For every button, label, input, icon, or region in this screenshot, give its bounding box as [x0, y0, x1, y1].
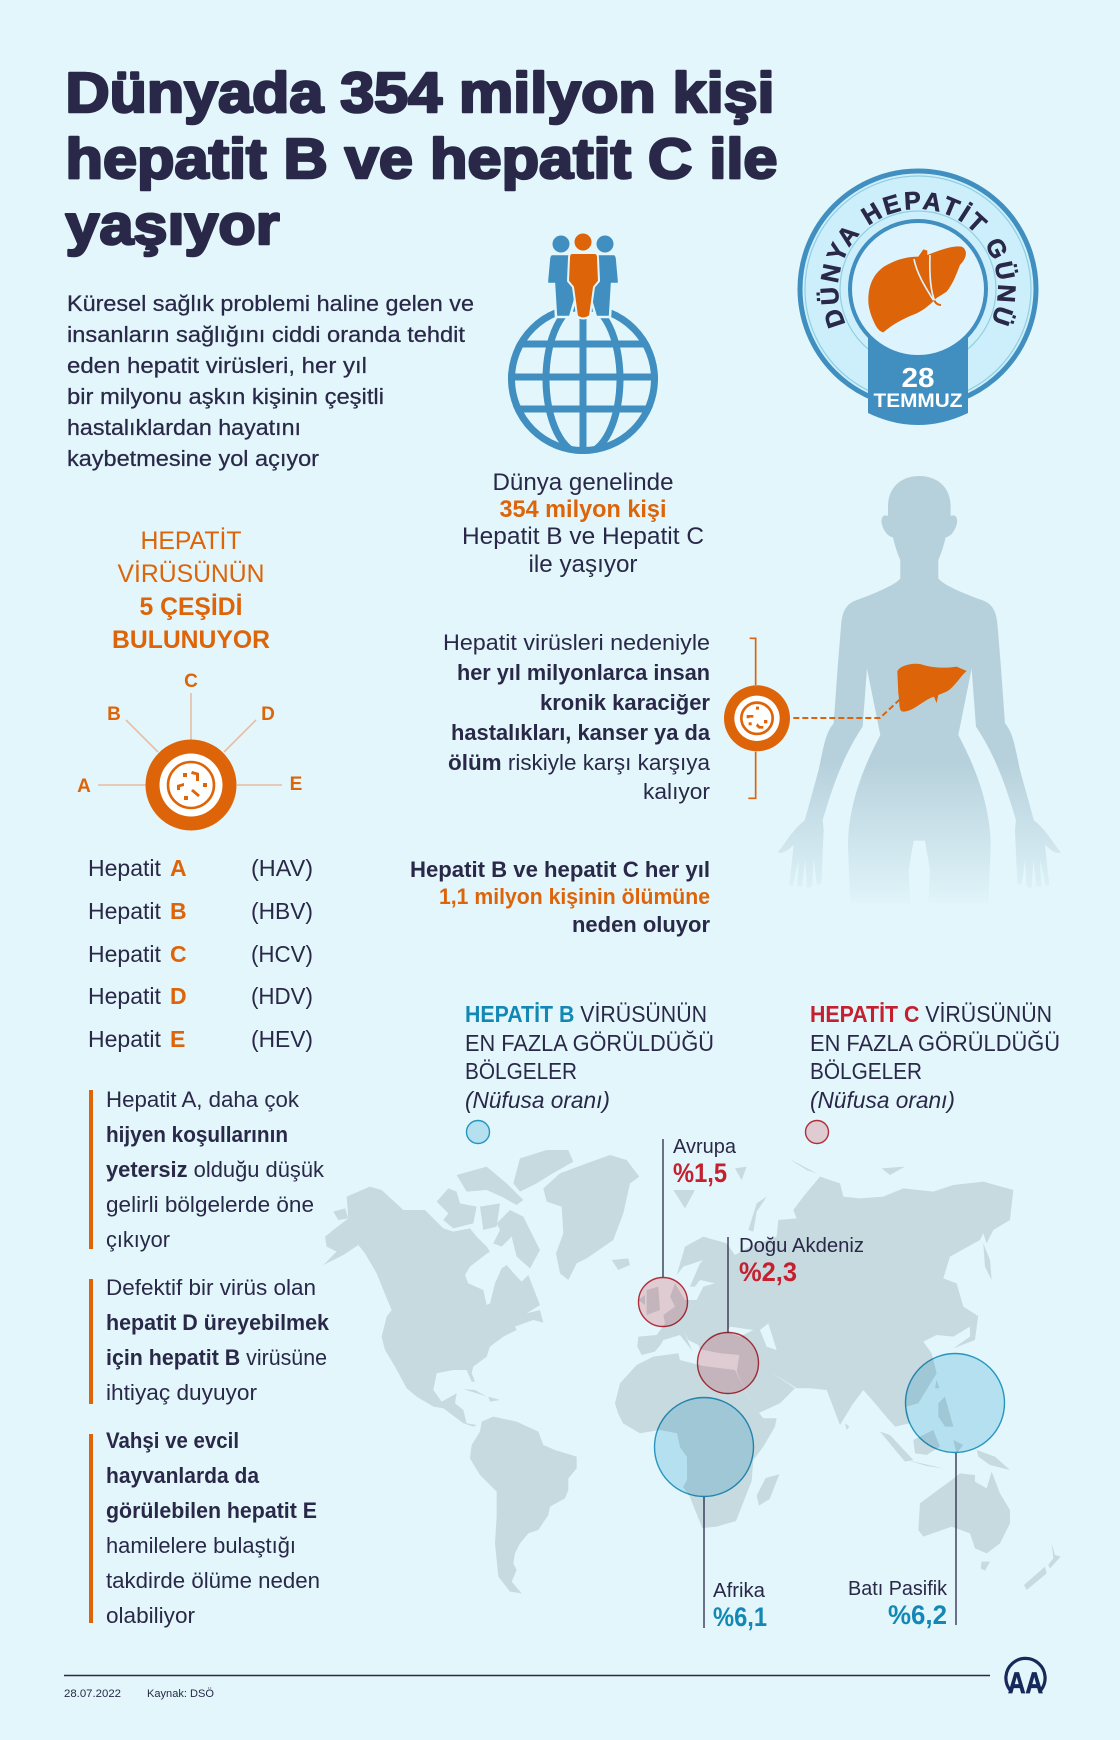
intro paragraph: Küresel sağlık problemi haline gelen ve [67, 291, 474, 316]
list: virus types: (HEV) [251, 1026, 313, 1052]
note: hepatit A: yetersiz olduğu düşük [106, 1157, 325, 1182]
icon: liver [897, 664, 967, 712]
intro paragraph: kaybetmesine yol açıyor [67, 446, 319, 471]
text: deaths [410, 857, 710, 937]
note: hepatit D: için hepatit B virüsüne [106, 1345, 327, 1370]
text: chronic disease: her yıl milyonlarca insan [457, 660, 710, 685]
intro paragraph: hastalıklardan hayatını [67, 415, 301, 440]
text: 354 milyon: Hepatit B ve Hepatit C [462, 523, 704, 550]
text: deaths: neden oluyor [572, 912, 710, 937]
badge ribbon text [874, 362, 963, 412]
heading: five types [112, 526, 270, 654]
bubble: Avrupa: Avrupa [673, 1136, 737, 1158]
note: hepatit A: hijyen koşullarının [106, 1122, 288, 1147]
logo: AA [1006, 1658, 1045, 1700]
icon: virus with five branches [77, 671, 302, 830]
list: virus types: E [170, 1026, 185, 1052]
icon: globe with people [508, 234, 658, 454]
heading: hepatit C regions: BÖLGELER [810, 1058, 922, 1084]
bubble: Batı Pasifik: Batı Pasifik [848, 1578, 948, 1600]
intro paragraph: eden hepatit virüsleri, her yıl [67, 353, 367, 378]
list: virus types: (HCV) [251, 941, 313, 967]
icon: virus with five branches: A [77, 776, 91, 797]
text: chronic disease: kalıyor [643, 779, 711, 804]
text: 354 milyon: Dünya genelinde [492, 469, 674, 496]
heading: five types: BULUNUYOR [112, 626, 270, 654]
heading: five types: VİRÜSÜNÜN [118, 559, 264, 588]
Africa, Eurasia and Asian islands [615, 1158, 1013, 1528]
note: hepatit E: olabiliyor [106, 1603, 195, 1628]
note: hepatit A [89, 1087, 325, 1252]
note: hepatit A: gelirli bölgelerde öne [106, 1192, 314, 1217]
badge arc text: DÜNYA HEPATİT GÜNÜ [816, 192, 1018, 328]
title: hepatit B ve hepatit C ile [66, 127, 778, 191]
bubble: Avrupa: %1,5 [673, 1158, 727, 1188]
heading: hepatit C regions: (Nüfusa oranı) [810, 1087, 955, 1113]
list: virus types: Hepatit [88, 855, 161, 881]
title: Dünyada 354 milyon kişi [66, 61, 774, 125]
icon: virus with five branches: C [184, 671, 198, 692]
text: 354 milyon [462, 469, 704, 578]
heading: hepatit C regions: EN FAZLA GÖRÜLDÜĞÜ [810, 1030, 1060, 1056]
title: yaşıyor [66, 193, 280, 257]
text: 354 milyon: 354 milyon kişi [500, 496, 666, 523]
text: chronic disease [443, 630, 711, 804]
note: hepatit E: takdirde ölüme neden [106, 1568, 320, 1593]
figure: body silhouette [724, 476, 1061, 903]
note: hepatit E [89, 1428, 320, 1628]
list: virus types: Hepatit [88, 983, 161, 1009]
icon: virus with five branches: E [290, 774, 302, 795]
intro paragraph [67, 291, 474, 471]
text: chronic disease: Hepatit virüsleri nedeniyle [443, 630, 710, 655]
text: deaths: Hepatit B ve hepatit C her yıl [410, 857, 710, 882]
logo: AA: AA [1008, 1667, 1043, 1700]
note: hepatit A: Hepatit A, daha çok [106, 1087, 300, 1112]
text: chronic disease: ölüm riskiyle karşı karşıya [448, 750, 710, 775]
icon: virus [724, 685, 790, 751]
list: virus types: A [170, 855, 187, 881]
North America, Greenland and Arctic islands [323, 1150, 639, 1427]
bracket [748, 638, 756, 798]
list: virus types [88, 855, 313, 1052]
icon: liver in badge [868, 246, 966, 332]
text: chronic disease: kronik karaciğer [540, 690, 710, 715]
badge ribbon text: 28 [902, 362, 934, 393]
heading: hepatit B regions: HEPATİT B VİRÜSÜNÜN [465, 1001, 707, 1027]
intro paragraph: bir milyonu aşkın kişinin çeşitli [67, 384, 384, 409]
note: hepatit A: çıkıyor [106, 1227, 170, 1252]
bubble: Afrika [654, 1398, 767, 1632]
list: virus types: (HBV) [251, 898, 313, 924]
heading: hepatit B regions: EN FAZLA GÖRÜLDÜĞÜ [465, 1030, 714, 1056]
heading: hepatit B regions [465, 1001, 714, 1144]
world map [323, 1150, 1061, 1593]
list: virus types: Hepatit [88, 898, 161, 924]
intro paragraph: insanların sağlığını ciddi oranda tehdit [67, 322, 465, 347]
bubble: Batı Pasifik: %6,2 [888, 1600, 947, 1630]
badge ribbon text: TEMMUZ [874, 390, 963, 412]
note: hepatit E: hayvanlarda da [106, 1463, 260, 1488]
icon: virus with five branches: B [107, 704, 121, 725]
list: virus types: Hepatit [88, 941, 161, 967]
dashed connector [793, 699, 900, 718]
list: virus types: (HAV) [251, 855, 313, 881]
South America [470, 1417, 577, 1593]
bubble: Doğu Akdeniz: %2,3 [739, 1257, 797, 1287]
note: hepatit E: görülebilen hepatit E [106, 1498, 317, 1523]
list: virus types: B [170, 898, 187, 924]
bubble: Doğu Akdeniz [698, 1235, 864, 1394]
bubble: Avrupa [638, 1136, 737, 1326]
heading: hepatit B regions: BÖLGELER [465, 1058, 577, 1084]
icon: virus with five branches: D [261, 704, 275, 725]
heading: hepatit C regions: HEPATİT C VİRÜSÜNÜN [810, 1001, 1052, 1027]
badge: Dünya Hepatit Günü [798, 168, 1038, 425]
title [66, 61, 778, 257]
heading: hepatit B regions: (Nüfusa oranı) [465, 1087, 610, 1113]
list: virus types: C [170, 941, 187, 967]
footer: Kaynak: DSÖ [147, 1688, 214, 1700]
bubble: Afrika: %6,1 [713, 1602, 767, 1632]
bubble: Afrika: Afrika [713, 1580, 766, 1602]
note: hepatit D: hepatit D üreyebilmek [106, 1310, 330, 1335]
heading: five types: 5 ÇEŞİDİ [140, 593, 242, 621]
footer [64, 1676, 990, 1700]
bubble: Batı Pasifik [848, 1354, 1004, 1630]
note: hepatit E: hamilelere bulaştığı [106, 1533, 296, 1558]
text: chronic disease: hastalıkları, kanser ya da [451, 720, 710, 745]
note: hepatit D [89, 1275, 330, 1405]
Australia and Oceania [890, 1442, 1061, 1590]
text: 354 milyon: ile yaşıyor [528, 551, 638, 578]
list: virus types: D [170, 983, 187, 1009]
footer: 28.07.2022 [64, 1688, 121, 1700]
heading: five types: HEPATİT [140, 526, 242, 555]
list: virus types: Hepatit [88, 1026, 161, 1052]
list: virus types: (HDV) [251, 983, 313, 1009]
bubble: Doğu Akdeniz: Doğu Akdeniz [739, 1235, 864, 1257]
text: deaths: 1,1 milyon kişinin ölümüne [439, 884, 710, 909]
note: hepatit E: Vahşi ve evcil [106, 1428, 239, 1453]
note: hepatit D: Defektif bir virüs olan [106, 1275, 316, 1300]
heading: hepatit C regions [806, 1001, 1060, 1144]
note: hepatit D: ihtiyaç duyuyor [106, 1380, 257, 1405]
